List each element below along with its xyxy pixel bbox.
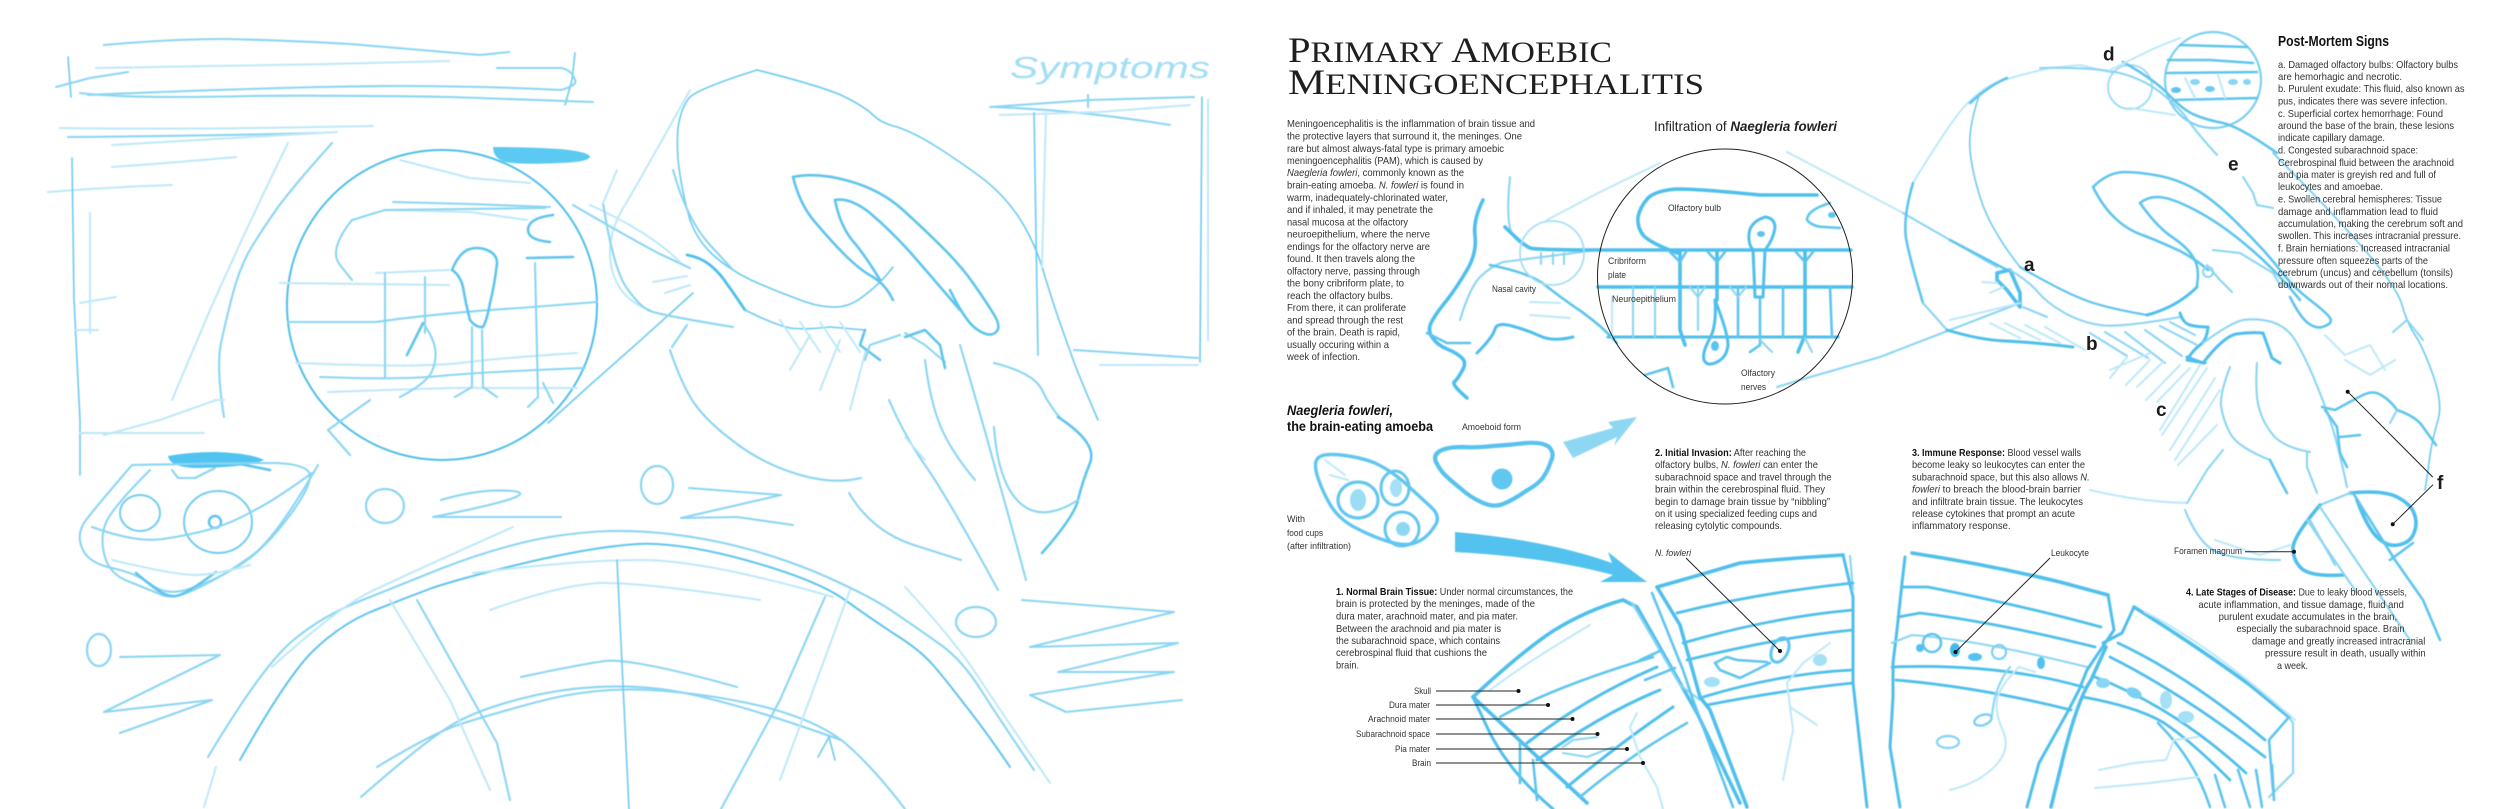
- illustration: amoeba with food cups: [1316, 454, 1437, 546]
- text: post-mortem signs list: e. Swollen cerebral hemispheres: Tissue: [2278, 194, 2442, 206]
- illustration: subarachnoid zoom inset: [2040, 32, 2277, 155]
- text: step 4 late stages: damage and greatly increased intracranial: [2252, 636, 2425, 648]
- intro text block: and if inhaled, it may penetrate the: [1287, 205, 1433, 216]
- illustration: small arrow: [1563, 417, 1637, 458]
- intro text block: meningoencephalitis (PAM), which is caused by: [1287, 156, 1484, 167]
- text: post-mortem signs list: b. Purulent exudate: This fluid, also known as: [2278, 84, 2464, 95]
- title: PRIMARY AMOEBIC: [1288, 30, 1612, 70]
- text: step 1 normal brain tissue: dura mater, arachnoid mater, and pia mater.: [1336, 612, 1518, 622]
- illustration: nose profile: [1427, 163, 1660, 398]
- intro text block: From there, it can proliferate: [1287, 303, 1406, 314]
- text: step 3 immune response: 3. Immune Response: Blood vessel walls: [1912, 448, 2081, 459]
- illustration: tissue panel 3 immune response: [1890, 553, 2114, 807]
- text: post-mortem signs list: pressure often squeezes parts of the: [2278, 256, 2428, 267]
- intro text block: usually occuring within a: [1287, 340, 1389, 351]
- text: post-mortem signs list: swollen. This increases intracranial pressure.: [2278, 231, 2461, 242]
- labels: infiltration diagram: [1492, 203, 1775, 393]
- intro text block: of the brain. Death is rapid,: [1287, 328, 1400, 338]
- text: step 2 initial invasion: brain within the cerebrospinal fluid. They: [1655, 485, 1826, 496]
- heading: brain-eating amoeba: the brain-eating amoeba: [1287, 418, 1433, 434]
- callout: leukocyte: Leukocyte: [2051, 548, 2089, 559]
- text: post-mortem signs list: damage and inflammation lead to fluid: [2278, 207, 2438, 218]
- callout: N. fowleri: [1655, 548, 1782, 653]
- markers: brain letters a to f: d: [2103, 45, 2115, 66]
- heading: brain-eating amoeba: Naegleria fowleri,: [1287, 402, 1393, 418]
- text: step 1 normal brain tissue: brain.: [1336, 660, 1359, 672]
- text: step 4 late stages: a week.: [2277, 661, 2308, 672]
- intro text block: the bony cribriform plate, to: [1287, 278, 1404, 290]
- markers: brain letters a to f: b: [2086, 334, 2098, 355]
- text: step 3 immune response: [1912, 448, 2090, 532]
- labels: meninges layers with leader lines: Subarachnoid space: [1356, 729, 1430, 740]
- text: post-mortem signs list: accumulation, making the cerebrum soft and: [2278, 219, 2463, 230]
- text: step 1 normal brain tissue: [1336, 587, 1573, 672]
- text: step 2 initial invasion: olfactory bulbs, N. fowleri can enter the: [1655, 460, 1818, 471]
- zoom circle outline: [1598, 149, 1852, 404]
- intro text block: [1286, 119, 1535, 363]
- text: step 4 late stages: [2186, 588, 2426, 672]
- labels: meninges layers with leader lines: [1356, 686, 1645, 769]
- intro text block: week of infection.: [1286, 352, 1360, 363]
- sketch: left brain cross-section: [548, 70, 1098, 590]
- intro text block: endings for the olfactory nerve are: [1287, 242, 1430, 253]
- heading: post-mortem signs: Post-Mortem Signs: [2278, 34, 2389, 50]
- text: step 1 normal brain tissue: the subarachnoid space, which contains: [1336, 636, 1500, 647]
- text: step 4 late stages: purulent exudate accumulates in the brain,: [2219, 612, 2397, 623]
- title: [1288, 30, 1704, 102]
- illustration: infiltration circle contents: [1598, 189, 1852, 387]
- labels: infiltration diagram: Neuroepithelium: [1612, 294, 1676, 305]
- text: post-mortem signs list: d. Congested subarachnoid space:: [2278, 146, 2418, 156]
- intro text block: reach the olfactory bulbs.: [1287, 291, 1393, 302]
- intro text block: found. It then travels along the: [1287, 254, 1415, 265]
- text: post-mortem signs list: leukocytes and amoebae.: [2278, 182, 2383, 193]
- text: step 1 normal brain tissue: cerebrospinal fluid that cushions the: [1336, 648, 1487, 659]
- text: step 4 late stages: pressure result in death, usually within: [2265, 648, 2426, 660]
- illustration: tissue panel 4 late stage: [2051, 607, 2295, 807]
- text: post-mortem signs list: pus, indicates there was severe infection.: [2278, 96, 2448, 108]
- sketch: symptoms heading and box: [990, 50, 1210, 365]
- panel: right finished illustration: [1316, 32, 2440, 809]
- text: step 2 initial invasion: begin to damage brain tissue by “nibbling”: [1655, 497, 1830, 508]
- intro text block: neuroepithelium, where the nerve: [1287, 230, 1430, 240]
- heading: infiltration: Infiltration of Naegleria fowleri: [1654, 118, 1838, 134]
- markers: brain letters a to f: a: [2024, 255, 2035, 276]
- intro text block: rare but almost always-fatal type is primary amoebic: [1287, 144, 1504, 155]
- text: post-mortem signs list: c. Superficial cortex hemorrhage: Found: [2278, 109, 2443, 120]
- labels: amoeba forms: [1287, 422, 1521, 552]
- text: step 3 immune response: release cytokines that prompt an acute: [1912, 509, 2075, 520]
- sketch: numbered text placeholders: [87, 466, 1182, 733]
- intro text block: olfactory nerve, passing through: [1287, 266, 1420, 278]
- labels: amoeba forms: With: [1287, 514, 1305, 525]
- labels: infiltration diagram: plate: [1608, 270, 1626, 281]
- text: step 2 initial invasion: releasing cytolytic compounds.: [1655, 521, 1782, 532]
- intro text block: Naegleria fowleri, commonly known as the: [1287, 168, 1464, 179]
- callout: N. fowleri: N. fowleri: [1655, 548, 1692, 559]
- text: step 3 immune response: fowleri to breach the blood-brain barrier: [1912, 485, 2081, 496]
- heading: brain-eating amoeba: [1287, 402, 1433, 434]
- labels: amoeba forms: Amoeboid form: [1462, 422, 1521, 433]
- labels: infiltration diagram: Olfactory: [1741, 368, 1775, 379]
- sketch: zoom circle with cell layers: [280, 147, 597, 460]
- text: post-mortem signs list: and pia mater is greyish red and full of: [2278, 170, 2436, 181]
- text: step 1 normal brain tissue: brain is protected by the meninges, made of the: [1336, 599, 1535, 610]
- labels: meninges layers with leader lines: Pia mater: [1395, 744, 1431, 755]
- text: step 3 immune response: become leaky so leukocytes can enter the: [1912, 460, 2085, 471]
- amoeba crossing upper plate: [1749, 217, 1775, 297]
- labels: infiltration diagram: nerves: [1741, 382, 1766, 393]
- markers: brain letters a to f: e: [2228, 155, 2239, 176]
- intro text block: the protective layers that surround it, the meninges. One: [1287, 132, 1522, 142]
- text: post-mortem signs list: a. Damaged olfactory bulbs: Olfactory bulbs: [2278, 60, 2458, 71]
- callout: foramen magnum: [2174, 546, 2296, 557]
- illustration: right brain cross-section: [1905, 65, 2440, 640]
- labels: meninges layers with leader lines: Dura mater: [1389, 700, 1431, 711]
- intro text block: Meningoencephalitis is the inflammation of brain tissue and: [1287, 119, 1535, 130]
- title: MENINGOENCEPHALITIS: [1288, 62, 1704, 102]
- olfactory bulb outline: [1638, 189, 1817, 253]
- markers: brain letters a to f: f: [2437, 473, 2444, 494]
- text: step 1 normal brain tissue: 1. Normal Brain Tissue: Under normal circumstances, the: [1336, 587, 1573, 598]
- hatching under the cerebrum: [1990, 322, 2220, 465]
- sketch: meninges arcs: [204, 527, 1050, 809]
- intro text block: and spread through the rest: [1287, 316, 1403, 326]
- labels: amoeba forms: food cups: [1287, 528, 1323, 539]
- illustration: big arrow toward step one: [1455, 532, 1647, 582]
- labels: infiltration diagram: Nasal cavity: [1492, 284, 1536, 295]
- markers: brain letters a to f: c: [2156, 400, 2167, 421]
- callout: leukocyte: [1954, 548, 2089, 654]
- text: step 2 initial invasion: on it using specialized feeding cups and: [1655, 509, 1817, 520]
- text: step 2 initial invasion: [1655, 448, 1832, 532]
- sketch: symptoms heading and box: Symptoms: [1010, 50, 1210, 85]
- text: step 4 late stages: especially the subarachnoid space. Brain: [2236, 624, 2405, 635]
- labels: meninges layers with leader lines: Skull: [1414, 686, 1431, 697]
- labels: infiltration diagram: Olfactory bulb: [1668, 203, 1721, 214]
- text: step 4 late stages: 4. Late Stages of Disease: Due to leaky blood vessels,: [2186, 588, 2407, 599]
- text: step 4 late stages: acute inflammation, and tissue damage, fluid and: [2198, 600, 2404, 611]
- text: step 3 immune response: subarachnoid space, but this also allows N.: [1912, 472, 2090, 484]
- intro text block: brain-eating amoeba. N. fowleri is found in: [1287, 180, 1464, 192]
- text: post-mortem signs list: [2278, 60, 2464, 291]
- text: step 1 normal brain tissue: Between the arachnoid and pia mater is: [1336, 624, 1501, 635]
- sketch: intro text placeholder: [48, 126, 373, 475]
- labels: amoeba forms: (after infiltration): [1287, 541, 1351, 552]
- panel: left preliminary sketch: [48, 39, 1210, 809]
- amoeba crossing lower layer: [1704, 300, 1728, 364]
- sketch: amoeba with food cups: [80, 452, 318, 596]
- labels: infiltration diagram: Cribriform: [1608, 256, 1646, 267]
- text: post-mortem signs list: cerebrum (uncus) and cerebellum (tonsils): [2278, 268, 2453, 279]
- text: step 2 initial invasion: subarachnoid space and travel through the: [1655, 472, 1832, 484]
- callout: foramen magnum: Foramen magnum: [2174, 546, 2242, 557]
- text: post-mortem signs list: indicate capillary damage.: [2278, 133, 2385, 144]
- text: step 2 initial invasion: 2. Initial Invasion: After reaching the: [1655, 448, 1806, 459]
- markers: brain letters a to f: [2024, 45, 2444, 526]
- text: post-mortem signs list: are hemorhagic and necrotic.: [2278, 72, 2402, 83]
- text: post-mortem signs list: downwards out of their normal locations.: [2278, 280, 2448, 291]
- sketch: title placeholder scribble: [56, 39, 593, 105]
- illustration: amoeboid form: [1435, 443, 1553, 506]
- herniated tonsil and foramen magnum: [2350, 492, 2416, 545]
- illustration: tissue panel 2 invasion: [1640, 555, 1867, 807]
- illustration: tissue panel 1 normal: [1473, 600, 1740, 809]
- text: post-mortem signs list: around the base of the brain, these lesions: [2278, 121, 2454, 132]
- labels: meninges layers with leader lines: Brain: [1412, 758, 1431, 769]
- text: post-mortem signs list: Cerebrospinal fluid between the arachnoid: [2278, 158, 2454, 169]
- intro text block: nasal mucosa at the olfactory: [1287, 218, 1409, 228]
- illustration: zoom cone lines: [1777, 152, 2020, 387]
- intro text block: warm, inadequately-chlorinated water,: [1286, 193, 1448, 204]
- text: post-mortem signs list: f. Brain herniations: Increased intracranial: [2278, 244, 2450, 254]
- text: step 3 immune response: and infiltrate brain tissue. The leukocytes: [1912, 497, 2083, 508]
- labels: meninges layers with leader lines: Arachnoid mater: [1368, 714, 1431, 725]
- text: step 3 immune response: inflammatory response.: [1912, 521, 2011, 532]
